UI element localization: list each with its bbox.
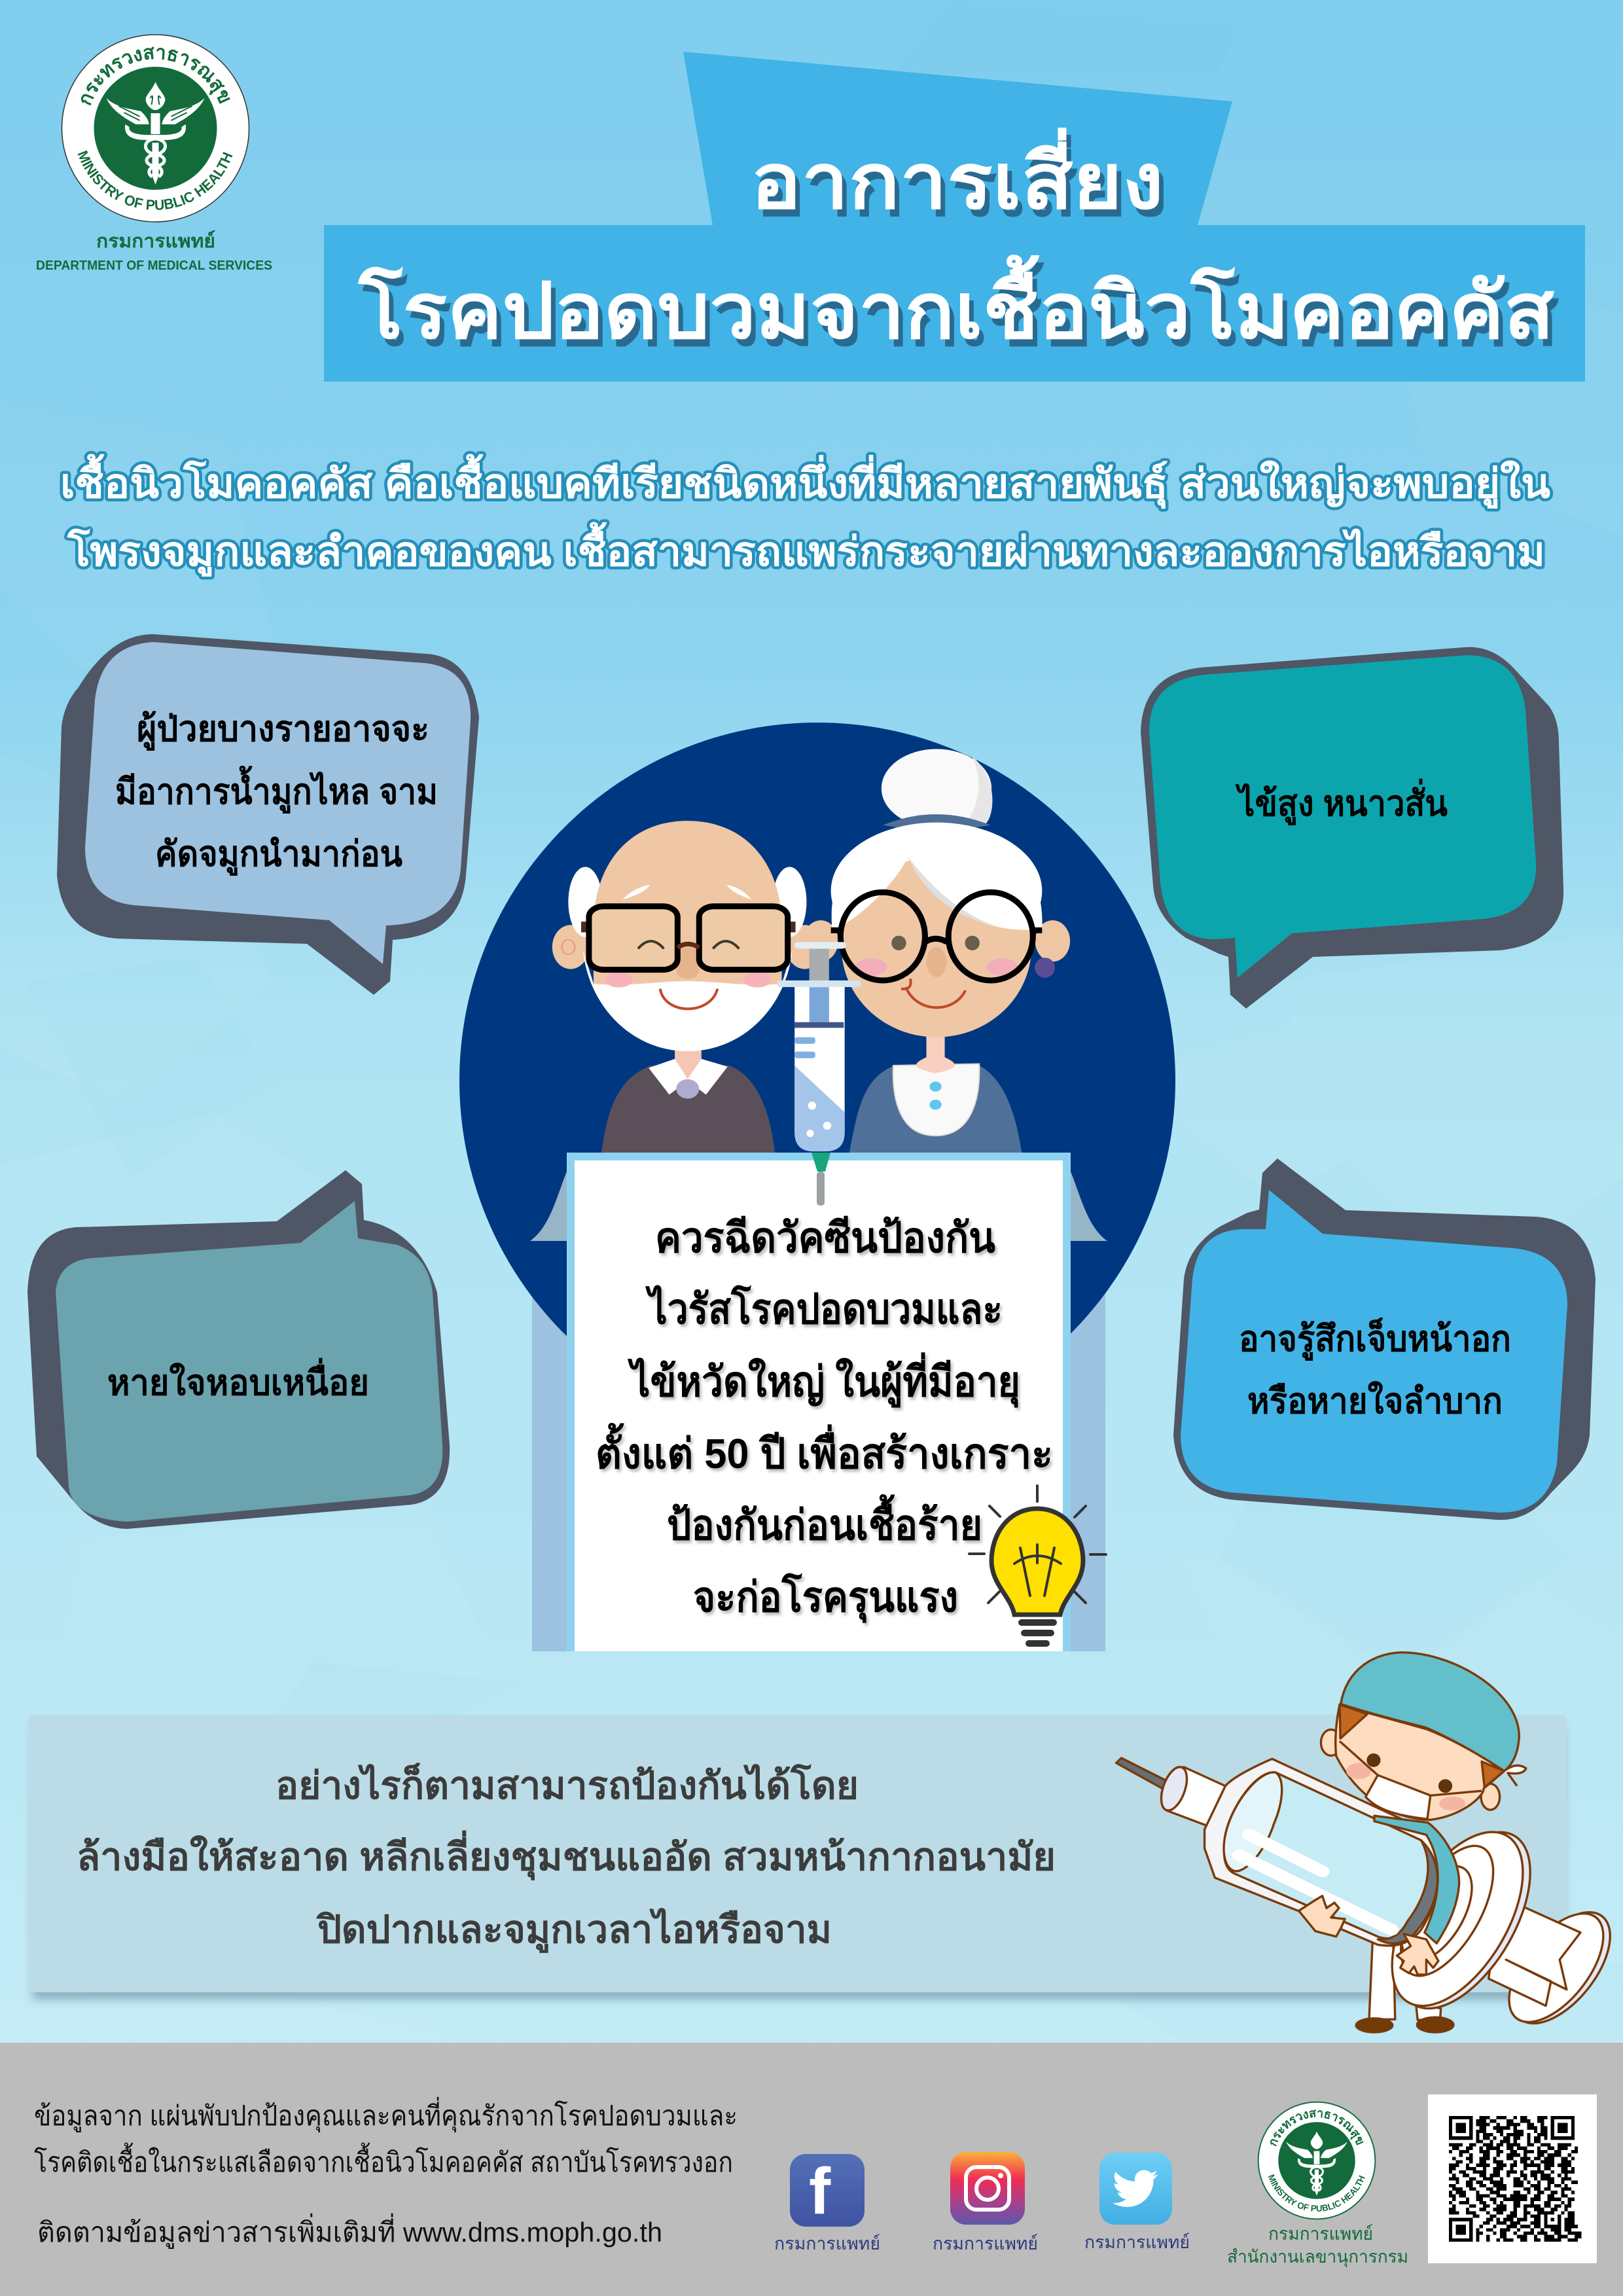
- title: อาการเสี่ยง: [751, 128, 1164, 225]
- icon: syringe needle: [812, 1153, 830, 1206]
- elderly man: [552, 821, 823, 1153]
- elderly woman: [804, 749, 1070, 1153]
- icon: facebook: กรมการแพทย์: [774, 2233, 880, 2253]
- panel: prevention: [28, 1715, 1567, 2000]
- bubble text: ไข้สูง หนาวสั่น: [1235, 778, 1448, 825]
- department name: DEPARTMENT OF MEDICAL SERVICES: [36, 259, 272, 273]
- icon: instagram: กรมการแพทย์: [933, 2233, 1038, 2253]
- footer band: [0, 2043, 1623, 2296]
- title banner: [324, 52, 1585, 382]
- footer source text: ข้อมูลจาก แผ่นพับปกป้องคุณและคนที่คุณรักจากโรคปอดบวมและ: [34, 2097, 738, 2133]
- logo: small ministry seal: MINISTRY OF PUBLIC HEALTH: [1268, 2174, 1365, 2212]
- bubble text: [1239, 1318, 1511, 1421]
- title: โรคปอดบวมจากเชื้อนิวโมคอคคัส: [358, 255, 1554, 355]
- card flares: [530, 1172, 1107, 1241]
- bubble text: คัดจมูกนำมาก่อน: [155, 834, 402, 876]
- logo: small ministry seal: [1258, 2101, 1376, 2220]
- icon: caduceus emblem: [106, 82, 204, 185]
- icon: twitter: [1084, 2153, 1190, 2252]
- bubble text: อาจรู้สึกเจ็บหน้าอก: [1239, 1318, 1511, 1361]
- department caption: [1227, 2223, 1408, 2268]
- logo text: กระทรวงสาธารณสุข: [81, 47, 230, 106]
- bubble text: มีอาการน้ำมูกไหล จาม: [115, 766, 438, 814]
- department caption: สำนักงานเลขานุการกรม: [1227, 2247, 1408, 2268]
- card text: ไวรัสโรคปอดบวมและ: [645, 1284, 1003, 1333]
- central navy circle: [459, 723, 1175, 1439]
- head: [1321, 1653, 1526, 1820]
- footer source text: [34, 2097, 738, 2249]
- bubble text: หายใจหอบเหนื่อย: [107, 1357, 369, 1403]
- speech bubble: high fever and chills: [1141, 647, 1563, 1009]
- speech bubble: shortness of breath: [27, 1170, 450, 1529]
- logo: ministry of public health: [62, 34, 250, 223]
- speech bubble: chest pain: [1173, 1158, 1596, 1520]
- footer source text: โรคติดเชื้อในกระแสเลือดจากเชื้อนิวโมคอคคัส สถาบันโรคทรวงอก: [34, 2142, 733, 2178]
- bubble text: ผู้ป่วยบางรายอาจจะ: [137, 709, 429, 751]
- prevention text: ล้างมือให้สะอาด หลีกเลี่ยงชุมชนแออัด สวมหน้ากากอนามัย: [77, 1830, 1056, 1881]
- illustration: doctor holding giant syringe: [1116, 1653, 1623, 2035]
- footer source text: ติดตามข้อมูลข่าวสารเพิ่มเติมที่ www.dms.moph.go.th: [37, 2214, 662, 2249]
- syringe barrel: [1116, 1758, 1459, 1946]
- intro text: โพรงจมูกและลำคอของคน เชื้อสามารถแพร่กระจายผ่านทางละอองการไอหรือจาม: [67, 522, 1545, 577]
- card text: ตั้งแต่ 50 ปี เพื่อสร้างเกราะ: [596, 1423, 1053, 1477]
- intro text: เชื้อนิวโมคอคคัส คือเชื้อแบคทีเรียชนิดหนึ่งที่มีหลายสายพันธุ์ ส่วนใหญ่จะพบอยู่ใน: [60, 454, 1550, 509]
- icon: twitter: กรมการแพทย์: [1084, 2232, 1190, 2252]
- icon: facebook: f: [809, 2155, 831, 2228]
- department name: [36, 230, 272, 273]
- doctor legs and shoes: [1355, 1941, 1454, 2033]
- logo: ministry of public health: MINISTRY OF PUBLIC HEALTH: [77, 151, 233, 210]
- card text: ไข้หวัดใหญ่ ในผู้ที่มีอายุ: [628, 1352, 1020, 1408]
- QR code: [1428, 2094, 1597, 2263]
- speech bubble: runny nose: [57, 634, 479, 995]
- prevention text: อย่างไรก็ตามสามารถป้องกันได้โดย: [276, 1763, 859, 1807]
- prevention text: [77, 1763, 1056, 1953]
- prevention text: ปิดปากและจมูกเวลาไอหรือจาม: [315, 1908, 832, 1953]
- department caption: กรมการแพทย์: [1268, 2223, 1373, 2244]
- syringe flange: [1365, 1818, 1558, 2022]
- card text: [596, 1214, 1053, 1623]
- panel: vaccine recommendation card: [567, 1153, 1106, 1651]
- hands: [1299, 1896, 1438, 1975]
- card text: ควรฉีดวัคซีนป้องกัน: [655, 1214, 995, 1261]
- card text: จะก่อโรครุนแรง: [693, 1572, 958, 1623]
- syringe plunger: [1489, 1901, 1623, 2035]
- icon: syringe: [777, 942, 861, 1151]
- logo: small ministry seal: กระทรวงสาธารณสุข: [1270, 2109, 1364, 2147]
- intro text: [60, 454, 1550, 577]
- icon: facebook: [774, 2154, 880, 2253]
- icon: instagram: [933, 2152, 1038, 2253]
- department name: กรมการแพทย์: [96, 230, 215, 252]
- illustration: elderly couple with syringe: [552, 749, 1070, 1153]
- panel: side wings behind card: [532, 1241, 1105, 1651]
- bubble text: หรือหายใจลำบาก: [1247, 1380, 1503, 1421]
- icon: light bulb: [969, 1486, 1106, 1643]
- bubble text: [115, 709, 438, 876]
- card text: ป้องกันก่อนเชื้อร้าย: [667, 1494, 982, 1549]
- title: [358, 128, 1554, 355]
